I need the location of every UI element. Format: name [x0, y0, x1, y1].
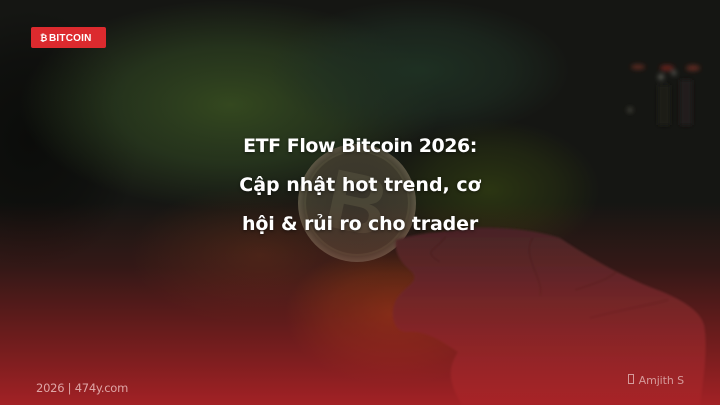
hand [393, 227, 706, 405]
coin bitcoin mark: B [318, 151, 396, 255]
badge: Bitcoin category: ₿ [40, 33, 48, 43]
title: hội & rủi ro cho trader [242, 213, 478, 235]
credit: photographer: Amjith S [639, 374, 684, 387]
badge: Bitcoin category [31, 27, 106, 48]
title [239, 135, 482, 236]
bitcoin coin [298, 144, 416, 262]
blurred foliage [0, 0, 600, 385]
blurred flowers, top right [627, 64, 700, 125]
title: Cập nhật hot trend, cơ [239, 174, 481, 196]
footer: year and site: 2026 | 474y.com [36, 381, 128, 395]
badge: Bitcoin category: BITCOIN [49, 33, 92, 44]
title: ETF Flow Bitcoin 2026: [243, 135, 477, 157]
